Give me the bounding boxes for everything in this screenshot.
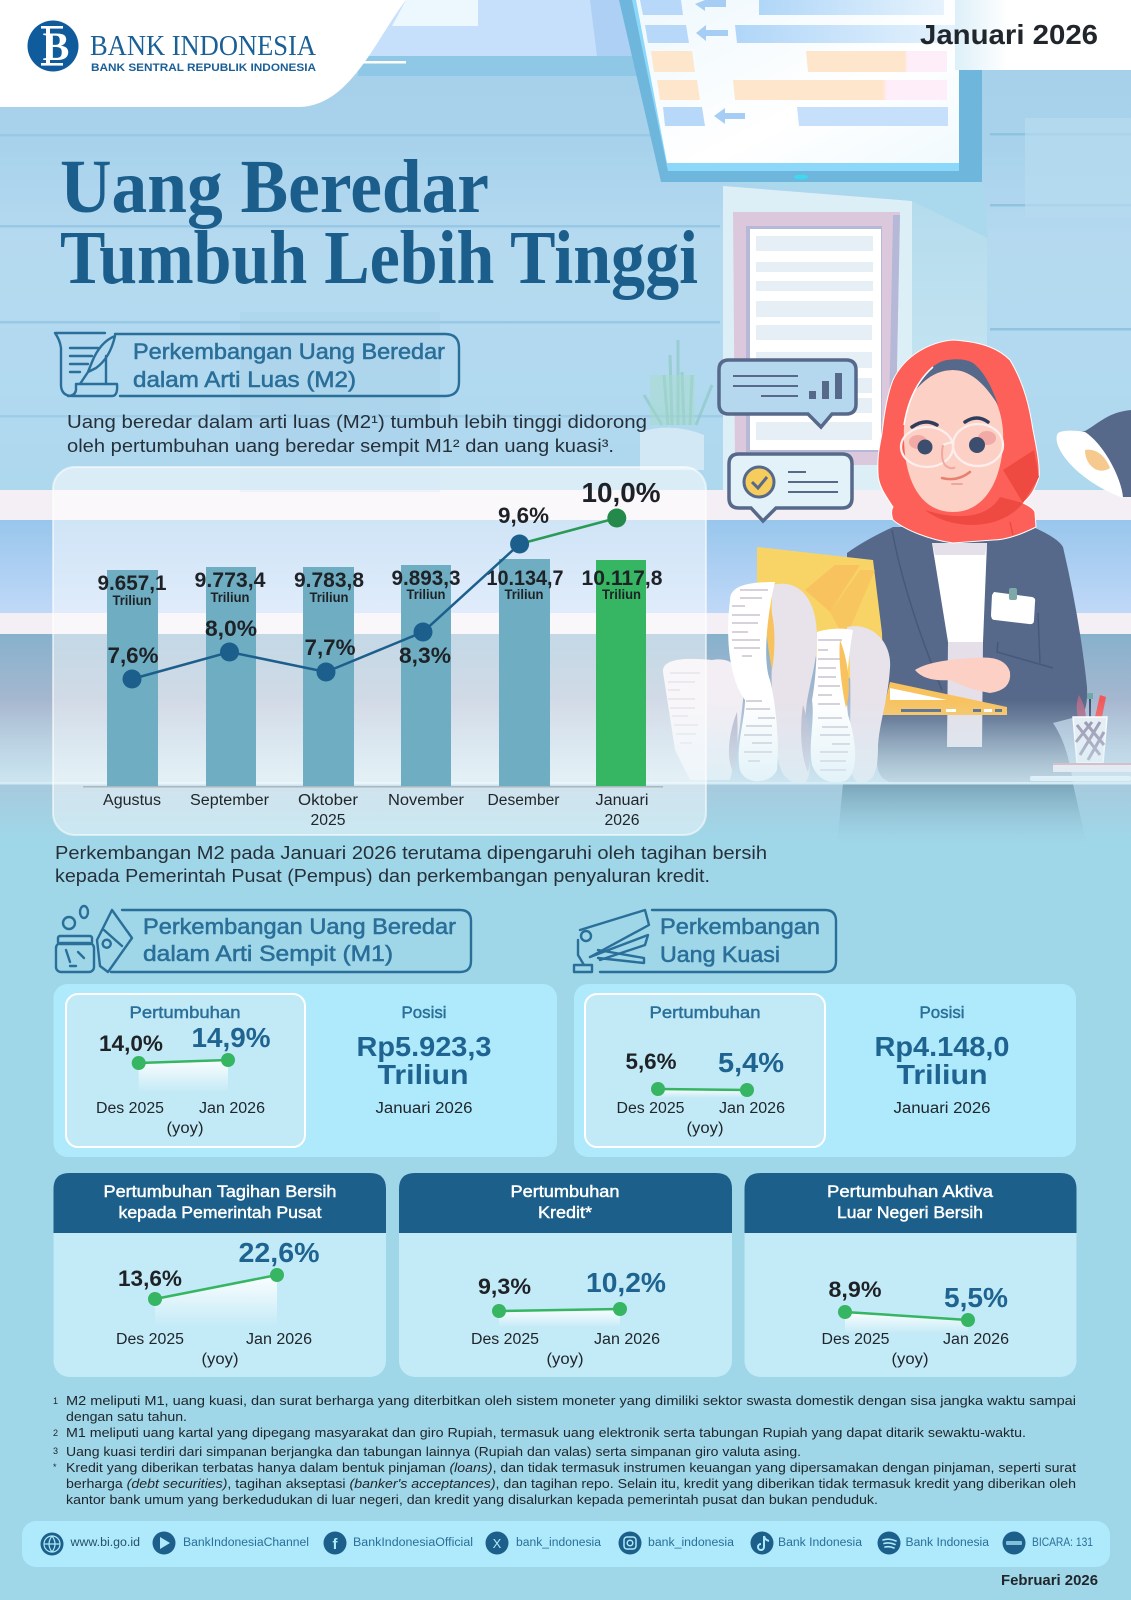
bar value labels: 10.117,8 xyxy=(582,567,663,590)
kuasi position: Triliun xyxy=(896,1059,988,1090)
bar value labels: Triliun xyxy=(602,586,641,602)
M2 explanation text: Perkembangan M2 pada Januari 2026 terutama dipengaruhi oleh tagihan bersih xyxy=(55,843,767,863)
growth labels: 7,7% xyxy=(304,635,356,660)
M1 position: Triliun xyxy=(378,1059,468,1090)
M1 growth box: (yoy) xyxy=(166,1120,204,1137)
icon: hand with cards xyxy=(574,910,649,972)
footer: social media bar: BICARA: 131 xyxy=(1032,1537,1093,1549)
card: tagihan bersih kepada pemerintah pusat: 13,6% xyxy=(118,1266,182,1291)
intro text xyxy=(67,412,647,456)
bar chart: M2 position xyxy=(83,477,663,829)
kuasi position: Rp4.148,0 xyxy=(874,1031,1010,1062)
footnotes: Uang kuasi terdiri dari simpanan berjangka dan tabungan lainnya (Rupiah dan valas) serta simpanan giro valuta asing. xyxy=(66,1444,801,1459)
card: tagihan bersih kepada pemerintah pusat: Jan 2026 xyxy=(246,1331,312,1348)
plant in pot xyxy=(640,340,712,470)
kuasi position: Januari 2026 xyxy=(894,1100,990,1117)
publication date: Februari 2026 xyxy=(1001,1573,1098,1589)
footnotes: 2 xyxy=(53,1428,58,1438)
M1 position: Posisi xyxy=(402,1004,446,1022)
icon: X xyxy=(486,1532,508,1554)
footer: social media bar: www.bi.go.id xyxy=(69,1537,140,1549)
title: Tumbuh Lebih Tinggi xyxy=(60,216,698,300)
icon: scroll and quill xyxy=(55,333,117,396)
panel: M2 chart glass card xyxy=(53,467,706,835)
bar value labels: Triliun xyxy=(112,592,152,608)
card: tagihan bersih kepada pemerintah pusat: 22,6% xyxy=(238,1237,320,1268)
footnotes: M1 meliputi uang kartal yang dipegang masyarakat dan giro Rupiah, termasuk uang elektronik serta tabungan Rupiah yang dapat ditarik sewaktu-waktu. xyxy=(66,1425,1026,1440)
section heading: uang kuasi xyxy=(574,910,836,972)
footnotes: Kredit yang diberikan terbatas hanya dalam bentuk pinjaman (loans), dan tidak termasuk instrumen keuangan yang dipersamakan dengan pinjaman, seperti surat xyxy=(66,1460,1076,1475)
jacket and body xyxy=(847,527,1087,783)
hand xyxy=(915,658,1010,693)
month labels: 2025 xyxy=(310,812,346,829)
bar value labels: 10.134,7 xyxy=(486,567,564,590)
footer: social media bar: bank_indonesia xyxy=(516,1537,602,1549)
card: kredit: Des 2025 xyxy=(471,1331,539,1348)
card: aktiva luar negeri bersih: Des 2025 xyxy=(822,1331,890,1348)
M1 growth box xyxy=(66,994,305,1147)
speech bubble: check list xyxy=(729,454,852,521)
face xyxy=(904,370,1003,512)
icon: coin jar and banknote xyxy=(56,906,132,972)
M2 explanation text: kepada Pemerintah Pusat (Pempus) dan perkembangan penyaluran kredit. xyxy=(55,866,710,886)
shirt xyxy=(932,543,987,642)
bar value labels: 9.783,8 xyxy=(294,569,364,592)
bar value labels: 9.893,3 xyxy=(392,567,460,590)
card: aktiva luar negeri bersih: (yoy) xyxy=(892,1351,928,1368)
kuasi growth box: Jan 2026 xyxy=(719,1100,785,1117)
footnotes xyxy=(53,1393,1076,1507)
icon: instagram xyxy=(618,1532,642,1554)
bar value labels: 9.657,1 xyxy=(98,572,167,595)
date: Januari 2026: Januari 2026 xyxy=(920,19,1098,50)
bar value labels: Triliun xyxy=(210,589,250,605)
footnotes: * xyxy=(53,1462,57,1472)
M1 growth box: Des 2025 xyxy=(96,1100,164,1117)
kuasi growth box: (yoy) xyxy=(686,1120,724,1137)
logo: Bank Indonesia: BANK INDONESIA xyxy=(90,30,316,62)
eyebrows, eyes, glasses and mouth xyxy=(912,418,988,427)
card: aktiva luar negeri bersih xyxy=(744,1173,1076,1377)
paper rolls xyxy=(663,582,890,783)
card: kredit xyxy=(399,1173,732,1377)
panel: uang kuasi xyxy=(574,984,1076,1157)
section heading: M2: Perkembangan Uang Beredar xyxy=(133,339,446,364)
footnotes: 1 xyxy=(53,1396,58,1406)
icon: website globe xyxy=(40,1532,64,1556)
card: kredit: Kredit* xyxy=(538,1204,593,1222)
month labels xyxy=(103,792,648,829)
kuasi growth box: Des 2025 xyxy=(616,1100,684,1117)
header white blob xyxy=(0,0,406,107)
desk lamp xyxy=(1057,410,1131,498)
panel: M1 xyxy=(54,984,557,1157)
card: tagihan bersih kepada pemerintah pusat: (yoy) xyxy=(202,1351,238,1368)
card: tagihan bersih kepada pemerintah pusat xyxy=(54,1173,386,1377)
growth labels: 10,0% xyxy=(582,477,661,508)
icon: X: X xyxy=(493,1536,502,1551)
bar value labels: Triliun xyxy=(310,589,348,605)
laptop xyxy=(757,547,1007,715)
top right white date bar xyxy=(955,0,1131,70)
growth labels: 8,0% xyxy=(205,616,257,641)
hijab xyxy=(878,340,1039,543)
section heading: M1: Perkembangan Uang Beredar xyxy=(143,914,457,939)
card: aktiva luar negeri bersih: Jan 2026 xyxy=(943,1331,1009,1348)
icon: facebook: f xyxy=(332,1536,338,1553)
card: kredit: Jan 2026 xyxy=(594,1331,660,1348)
logo: Bank Indonesia: B xyxy=(43,24,69,69)
icon: facebook xyxy=(324,1532,346,1554)
bar value labels xyxy=(98,567,663,608)
kuasi growth box: 5,6% xyxy=(626,1049,676,1074)
card: kredit: 10,2% xyxy=(586,1267,666,1298)
footnotes: 3 xyxy=(53,1446,58,1456)
section heading: uang kuasi: Uang Kuasi xyxy=(660,942,780,967)
pillar with framed paper xyxy=(723,182,988,490)
card: tagihan bersih kepada pemerintah pusat: Pertumbuhan Tagihan Bersih xyxy=(104,1183,336,1201)
speech bubble: report chart xyxy=(719,360,856,427)
icon: tiktok xyxy=(750,1532,774,1554)
jacket details xyxy=(892,530,1053,690)
bar value labels: Triliun xyxy=(504,586,544,602)
footer: social media bar: bank_indonesia xyxy=(648,1537,735,1549)
intro text: Uang beredar dalam arti luas (M2¹) tumbuh lebih tinggi didorong xyxy=(67,412,647,432)
card: aktiva luar negeri bersih: Pertumbuhan Aktiva xyxy=(827,1183,994,1201)
footer: social media bar: Bank Indonesia xyxy=(906,1537,990,1549)
section heading: uang kuasi: Perkembangan xyxy=(660,914,820,939)
pencil holder and books xyxy=(1030,693,1131,781)
glass desk and reflection xyxy=(0,700,1131,845)
month labels: November xyxy=(388,792,464,809)
card: tagihan bersih kepada pemerintah pusat: Des 2025 xyxy=(116,1331,184,1348)
kuasi position xyxy=(874,1004,1010,1117)
month labels: 2026 xyxy=(604,812,640,829)
M1 position: Januari 2026 xyxy=(376,1100,472,1117)
logo: Bank Indonesia xyxy=(28,20,316,74)
section heading: M1 xyxy=(56,906,471,972)
M1 growth box: 14,0% xyxy=(99,1031,163,1056)
intro text: oleh pertumbuhan uang beredar sempit M1² dan uang kuasi³. xyxy=(67,436,614,456)
month labels: Oktober xyxy=(298,792,358,809)
title: Uang Beredar xyxy=(60,145,489,229)
name badge xyxy=(991,588,1035,624)
icon: bicara xyxy=(1002,1532,1026,1554)
footnotes: M2 meliputi M1, uang kuasi, dan surat berharga yang diterbitkan oleh sistem moneter yang dimiliki sektor swasta domestik dengan sisa jangka waktu sampai xyxy=(66,1393,1076,1408)
card: aktiva luar negeri bersih: Luar Negeri Bersih xyxy=(837,1204,983,1222)
footnotes: berharga (debt securities) , tagihan akseptasi (banker's acceptances) , dan tagihan repo. Selain itu, kredit yang diberikan tidak termasuk kredit yang diberikan oleh xyxy=(66,1476,1076,1491)
M1 position: Rp5.923,3 xyxy=(356,1031,492,1062)
section heading: M1: dalam Arti Sempit (M1) xyxy=(143,941,393,966)
month labels: Desember xyxy=(488,792,560,809)
monitor on the wall xyxy=(619,0,982,182)
M1 position xyxy=(356,1004,492,1117)
M1 growth box: Pertumbuhan xyxy=(130,1004,240,1022)
growth labels: 7,6% xyxy=(108,643,158,668)
M2 explanation text xyxy=(55,843,767,886)
card: kredit: (yoy) xyxy=(546,1351,584,1368)
M1 growth box: Jan 2026 xyxy=(199,1100,265,1117)
title xyxy=(60,145,698,300)
growth labels: 9,6% xyxy=(498,503,549,528)
growth labels: 8,3% xyxy=(399,643,451,668)
card: kredit: Pertumbuhan xyxy=(510,1183,620,1201)
month labels: Agustus xyxy=(103,792,161,809)
growth line xyxy=(122,508,626,688)
icon: spotify xyxy=(878,1532,900,1554)
icon: youtube xyxy=(152,1532,176,1554)
woman character xyxy=(663,340,1087,783)
footnotes: kantor bank umum yang berkedudukan di luar negeri, dan kredit yang disalurkan kepada pemerintah pusat dan bukan penduduk. xyxy=(66,1492,878,1507)
kuasi position: Posisi xyxy=(920,1004,964,1022)
footer: social media bar: BankIndonesiaOfficial xyxy=(353,1537,473,1549)
card: kredit: 9,3% xyxy=(478,1274,531,1299)
logo: Bank Indonesia: BANK SENTRAL REPUBLIK INDONESIA xyxy=(91,62,316,74)
section heading: M2: dalam Arti Luas (M2) xyxy=(133,367,356,392)
bar value labels: 9.773,4 xyxy=(194,569,266,592)
card: aktiva luar negeri bersih: 5,5% xyxy=(944,1282,1008,1313)
card: tagihan bersih kepada pemerintah pusat: kepada Pemerintah Pusat xyxy=(118,1204,322,1222)
kuasi growth box: 5,4% xyxy=(718,1047,784,1078)
growth labels xyxy=(108,477,661,668)
footer: social media bar: Bank Indonesia xyxy=(778,1537,863,1549)
M1 growth box: 14,9% xyxy=(192,1022,271,1053)
month labels: Januari xyxy=(596,792,648,809)
footnotes: dengan satu tahun. xyxy=(66,1409,187,1424)
month labels: September xyxy=(190,792,269,809)
kuasi growth box: Pertumbuhan xyxy=(650,1004,760,1022)
footer: social media bar: BankIndonesiaChannel xyxy=(183,1537,309,1549)
bar value labels: Triliun xyxy=(406,586,446,602)
kuasi growth box xyxy=(585,994,825,1147)
card: aktiva luar negeri bersih: 8,9% xyxy=(828,1277,882,1302)
footer: social media bar xyxy=(22,1521,1110,1567)
section heading: M2 xyxy=(55,333,459,396)
